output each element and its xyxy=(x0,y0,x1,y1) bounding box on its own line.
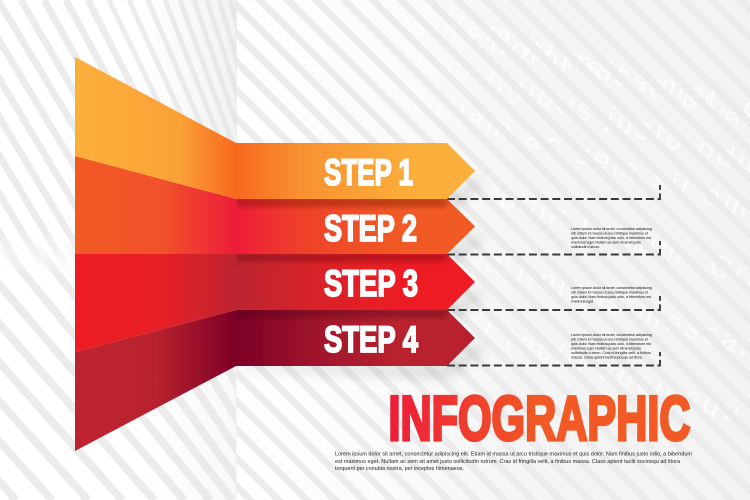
description 3: maximus eget. Nullam ac sem sit amet justo xyxy=(571,346,642,350)
description 1: sollicitudin rutrum. xyxy=(571,244,600,249)
step 4 label: STEP 4 xyxy=(324,319,418,360)
description 3: massa. Class aptent taciti sociosqu ad litora xyxy=(571,354,643,360)
dashed connector lines xyxy=(447,185,660,366)
description 2: Lorem ipsum dolor sit amet, consectetur adipiscing xyxy=(571,285,652,290)
connector 4 xyxy=(447,352,660,366)
body paragraph: torquent per conubia nostra, per inceptos himenaeos. xyxy=(335,466,464,472)
step labels xyxy=(324,152,418,360)
shade beside funnel xyxy=(140,0,236,143)
step 1 label: STEP 1 xyxy=(324,152,413,193)
description 3 xyxy=(571,332,652,360)
arrow cast shadows xyxy=(240,178,486,378)
connector 3 xyxy=(447,296,660,310)
body paragraph: est maximus eget. Nullam ac sem sit amet justo sollicitudin rutrum. Cras id fringilla velit, a finibus massa. Class aptent taciti sociosqu ad litora xyxy=(335,459,681,465)
left fan stripes upper xyxy=(0,0,236,257)
body paragraph: Lorem ipsum dolor sit amet, consectetur adipiscing elit. Etiam id massa ut arcu tristique maximus et quis dolor. Nam finibus justo odio, a bibendum xyxy=(335,452,692,458)
description 1: quis dolor. Nam finibus justo odio, a bibendum est xyxy=(571,235,652,240)
band 3 xyxy=(75,254,475,352)
body paragraph xyxy=(335,452,692,472)
funnel and step arrows xyxy=(75,57,475,451)
step descriptions xyxy=(571,226,652,360)
description 2 xyxy=(571,285,652,304)
connector 2 xyxy=(447,241,660,254)
description 3: sollicitudin rutrum. Cras id fringilla velit, a finibus xyxy=(571,350,651,355)
description 1: elit. Etiam id massa ut arcu tristique maximus et xyxy=(571,230,649,236)
band 1 xyxy=(75,57,475,199)
step 2 label: STEP 2 xyxy=(324,208,417,249)
description 1: maximus eget. Nullam ac sem sit amet justo xyxy=(571,240,642,244)
connector 1 xyxy=(447,185,660,199)
description 2: quis dolor. Nam finibus justo odio, a bibendum est xyxy=(571,294,652,299)
band 2 xyxy=(75,156,475,254)
left fan stripes lower xyxy=(0,253,236,500)
background lettering xyxy=(653,89,750,406)
step 3 label: STEP 3 xyxy=(324,263,418,304)
description 3: Lorem ipsum dolor sit amet, consectetur adipiscing xyxy=(571,332,652,337)
description 3: quis dolor. Nam finibus justo odio, a bibendum est xyxy=(571,341,652,346)
description 1 xyxy=(571,226,652,249)
description 1: Lorem ipsum dolor sit amet, consectetur adipiscing xyxy=(571,226,652,231)
description 3: elit. Etiam id massa ut arcu tristique maximus et xyxy=(571,336,649,342)
description 2: maximus eget. xyxy=(571,298,594,304)
band 4 xyxy=(75,310,475,451)
description 2: elit. Etiam id massa ut arcu tristique maximus et xyxy=(571,290,649,294)
